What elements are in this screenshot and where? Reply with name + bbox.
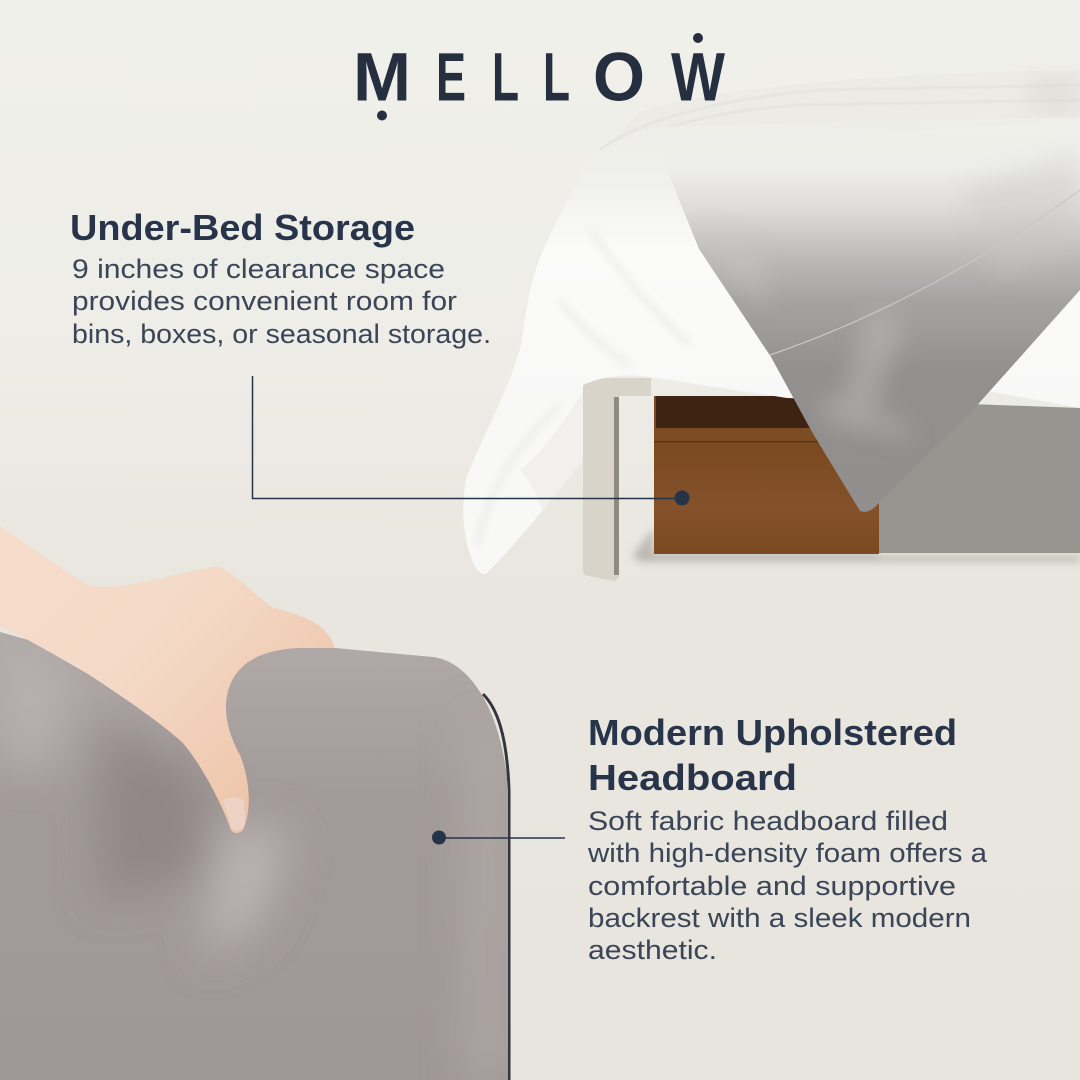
heading: Modern Upholstered Headboard: Headboard (588, 757, 797, 798)
heading: Modern Upholstered Headboard (588, 712, 957, 798)
white duvet (463, 117, 1080, 574)
heading: Modern Upholstered Headboard: Modern Upholstered (588, 712, 957, 753)
heading: Under-Bed Storage: Under-Bed Storage (70, 207, 415, 248)
body: under-bed storage description: provides convenient room for (72, 286, 457, 316)
fingernail (223, 798, 245, 831)
body: headboard description (587, 806, 988, 965)
storage box (654, 396, 879, 554)
logo: MELLOW: W (671, 38, 726, 116)
bed leg (583, 378, 651, 581)
duvet fold shading (478, 230, 690, 545)
logo: MELLOW (353, 33, 726, 120)
body: under-bed storage description (72, 254, 491, 349)
logo: MELLOW: L (492, 38, 519, 116)
logo: MELLOW: E (436, 38, 466, 116)
section: headboard text (587, 712, 988, 965)
grey throw blanket (672, 155, 1080, 512)
body: under-bed storage description: bins, boxes, or seasonal storage. (72, 319, 491, 349)
callout: leader to headboard (432, 830, 565, 844)
body: under-bed storage description: 9 inches of clearance space (72, 254, 445, 284)
faint upper bedding layers (535, 70, 1080, 290)
body: headboard description: aesthetic. (588, 935, 717, 965)
logo: MELLOW: O (593, 38, 645, 116)
photo: upholstered headboard (0, 630, 510, 1080)
logo: MELLOW: L (543, 38, 570, 116)
body: headboard description: backrest with a sleek modern (588, 903, 971, 933)
photo: bed with storage box (463, 70, 1080, 581)
logo: MELLOW: M (353, 38, 411, 116)
body: headboard description: with high-density foam offers a (587, 838, 988, 868)
photo: hand gripping headboard (0, 526, 335, 833)
headboard dark back edge (483, 694, 509, 1080)
floor shadow under bed (632, 400, 1080, 562)
callout: leader to storage box (252, 376, 690, 506)
underside of hanging duvet (520, 392, 583, 510)
section: under-bed storage text (70, 207, 491, 349)
body: headboard description: comfortable and supportive (588, 871, 956, 901)
headboard fabric (0, 630, 510, 1080)
body: headboard description: Soft fabric headboard filled (588, 806, 948, 836)
